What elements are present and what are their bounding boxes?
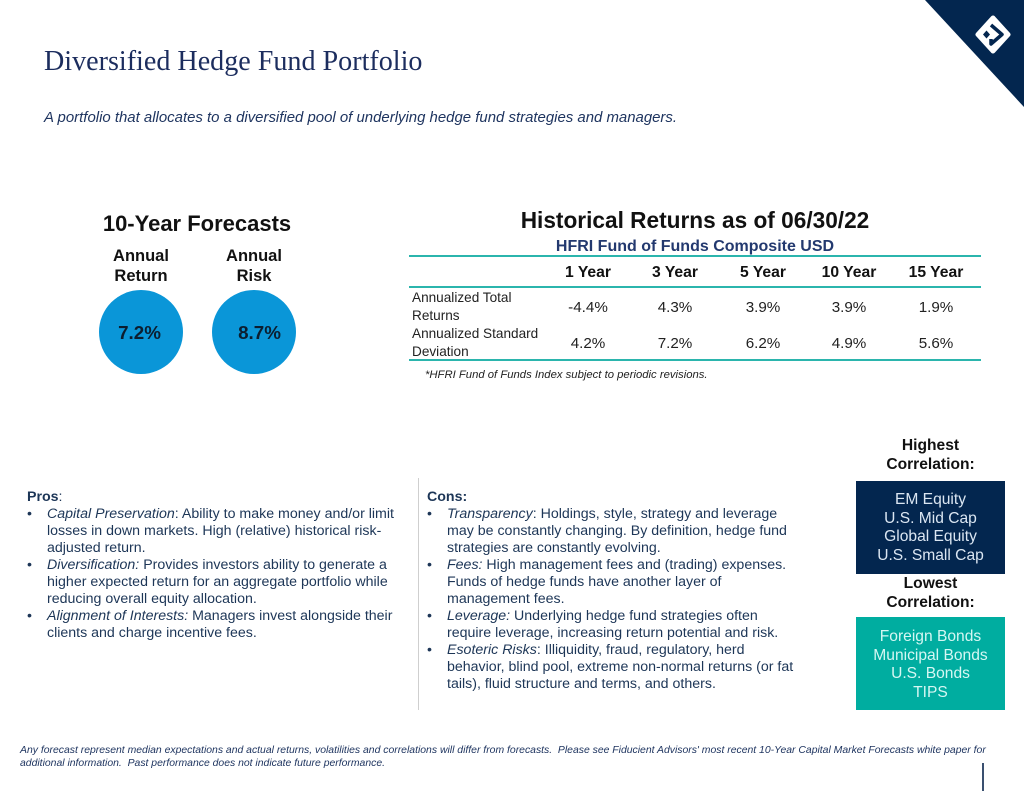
panel: pros: • bbox=[27, 506, 32, 522]
panel: cons: Funds of hedge funds have another layer of bbox=[447, 574, 721, 590]
circle: annual return 7.2% bbox=[99, 290, 183, 374]
panel: cons: • bbox=[427, 557, 432, 573]
circle: annual return 7.2%: 7.2% bbox=[118, 322, 161, 343]
box: highest correlation assets: U.S. Mid Cap bbox=[884, 510, 977, 527]
row: annualized standard deviation: 4.2% bbox=[571, 335, 605, 352]
heading: highest correlation: Correlation: bbox=[886, 456, 975, 473]
label: annual risk: Risk bbox=[237, 267, 271, 285]
heading: highest correlation: Highest bbox=[902, 437, 959, 454]
disclaimer: Any forecast represent median expectations and actual returns, volatilities and correlations will differ from forecasts. Please see Fiducient Advisors' most recent 10-Year Capital Market Forecasts white paper for bbox=[20, 745, 986, 756]
heading: lowest correlation: Correlation: bbox=[886, 594, 975, 611]
disclaimer: additional information. Past performance does not indicate future performance. bbox=[20, 758, 385, 769]
panel: pros: Diversification: Provides investors ability to generate a bbox=[47, 557, 387, 573]
corner logo bbox=[925, 0, 1024, 107]
row: annualized total returns: -4.4% bbox=[568, 299, 608, 316]
panel: 10-year forecasts bbox=[99, 211, 296, 374]
row: annualized standard deviation: 6.2% bbox=[746, 335, 780, 352]
column headers: 15 Year bbox=[909, 264, 963, 281]
label: annual risk bbox=[226, 247, 282, 285]
row: annualized standard deviation: Annualized Standard bbox=[412, 326, 538, 341]
panel: cons: may be constantly changing. By definition, hedge fund bbox=[447, 523, 787, 539]
row: annualized total returns: 3.9% bbox=[746, 299, 780, 316]
column headers: 3 Year bbox=[652, 264, 698, 281]
box: highest correlation assets: Global Equity bbox=[884, 528, 977, 545]
panel: pros: adjusted return. bbox=[47, 540, 146, 556]
panel: cons: • bbox=[427, 608, 432, 624]
table: HFRI fund of funds composite bbox=[409, 238, 981, 361]
box: highest correlation assets bbox=[856, 481, 1005, 574]
table footnote: *HFRI Fund of Funds Index subject to periodic revisions. bbox=[425, 369, 708, 381]
column headers: 5 Year bbox=[740, 264, 786, 281]
panel: cons bbox=[427, 489, 794, 692]
panel: pros: • bbox=[27, 557, 32, 573]
label: annual return: Return bbox=[114, 267, 168, 285]
box: highest correlation assets: U.S. Small Cap bbox=[877, 547, 984, 564]
panel: cons: behavior, blind pool, extreme non-normal returns (or fat bbox=[447, 659, 793, 675]
table subheading: HFRI Fund of Funds Composite USD bbox=[556, 238, 834, 255]
panel: pros: Pros: bbox=[27, 489, 62, 505]
panel: cons: Esoteric Risks: Illiquidity, fraud, regulatory, herd bbox=[447, 642, 745, 658]
heading: historical returns: Historical Returns as of 06/30/22 bbox=[521, 207, 869, 233]
box: lowest correlation assets bbox=[856, 617, 1005, 710]
heading: lowest correlation bbox=[886, 575, 975, 611]
title: Diversified Hedge Fund Portfolio bbox=[44, 46, 422, 77]
panel: pros: higher expected return for an aggregate portfolio while bbox=[47, 574, 388, 590]
panel: cons: Transparency: Holdings, style, strategy and leverage bbox=[447, 506, 777, 522]
panel: pros: Alignment of Interests: Managers invest alongside their bbox=[47, 608, 392, 624]
panel: cons: strategies are constantly evolving. bbox=[447, 540, 661, 556]
panel: cons: require leverage, increasing return potential and risk. bbox=[447, 625, 778, 641]
row: annualized total returns bbox=[412, 290, 953, 323]
row: annualized standard deviation: 4.9% bbox=[832, 335, 866, 352]
panel: pros: clients and charge incentive fees. bbox=[47, 625, 257, 641]
column headers: 1 Year bbox=[565, 264, 611, 281]
panel: cons: Leverage: Underlying hedge fund strategies often bbox=[447, 608, 758, 624]
row: annualized standard deviation: 5.6% bbox=[919, 335, 953, 352]
panel: pros: reducing overall equity allocation. bbox=[47, 591, 257, 607]
row: annualized standard deviation bbox=[412, 326, 953, 359]
panel: cons: • bbox=[427, 642, 432, 658]
heading: lowest correlation: Lowest bbox=[904, 575, 957, 592]
row: annualized standard deviation: Deviation bbox=[412, 344, 469, 359]
column headers bbox=[565, 264, 964, 281]
label: annual return: Annual bbox=[113, 247, 169, 265]
panel: cons: Fees: High management fees and (trading) expenses. bbox=[447, 557, 786, 573]
box: highest correlation assets: EM Equity bbox=[895, 491, 966, 508]
column headers: 10 Year bbox=[822, 264, 876, 281]
panel: cons: • bbox=[427, 506, 432, 522]
circle: annual risk 8.7% bbox=[212, 290, 296, 374]
box: lowest correlation assets: TIPS bbox=[913, 684, 948, 701]
panel: pros bbox=[27, 489, 394, 641]
row: annualized standard deviation: 7.2% bbox=[658, 335, 692, 352]
box: lowest correlation assets: Foreign Bonds bbox=[880, 628, 981, 645]
panel: cons: Cons: bbox=[427, 489, 467, 505]
row: annualized total returns: 3.9% bbox=[832, 299, 866, 316]
row: annualized total returns: Returns bbox=[412, 308, 460, 323]
box: lowest correlation assets: U.S. Bonds bbox=[891, 665, 970, 682]
circle: annual risk 8.7%: 8.7% bbox=[238, 322, 281, 343]
panel: cons: tails), fluid structure and terms, and others. bbox=[447, 676, 716, 692]
row: annualized total returns: 1.9% bbox=[919, 299, 953, 316]
panel: pros: Capital Preservation: Ability to make money and/or limit bbox=[47, 506, 394, 522]
row: annualized total returns: Annualized Total bbox=[412, 290, 512, 305]
panel: cons: management fees. bbox=[447, 591, 565, 607]
row: annualized total returns: 4.3% bbox=[658, 299, 692, 316]
panel: pros: losses in down markets. High (relative) historical risk- bbox=[47, 523, 381, 539]
label: annual risk: Annual bbox=[226, 247, 282, 265]
disclaimer bbox=[20, 745, 986, 769]
label: annual return bbox=[113, 247, 169, 285]
heading: highest correlation bbox=[886, 437, 975, 473]
box: lowest correlation assets: Municipal Bonds bbox=[873, 647, 988, 664]
panel: pros: • bbox=[27, 608, 32, 624]
subtitle: A portfolio that allocates to a diversified pool of underlying hedge fund strategies and managers. bbox=[44, 109, 677, 126]
forecasts heading: 10-Year Forecasts bbox=[103, 211, 291, 236]
